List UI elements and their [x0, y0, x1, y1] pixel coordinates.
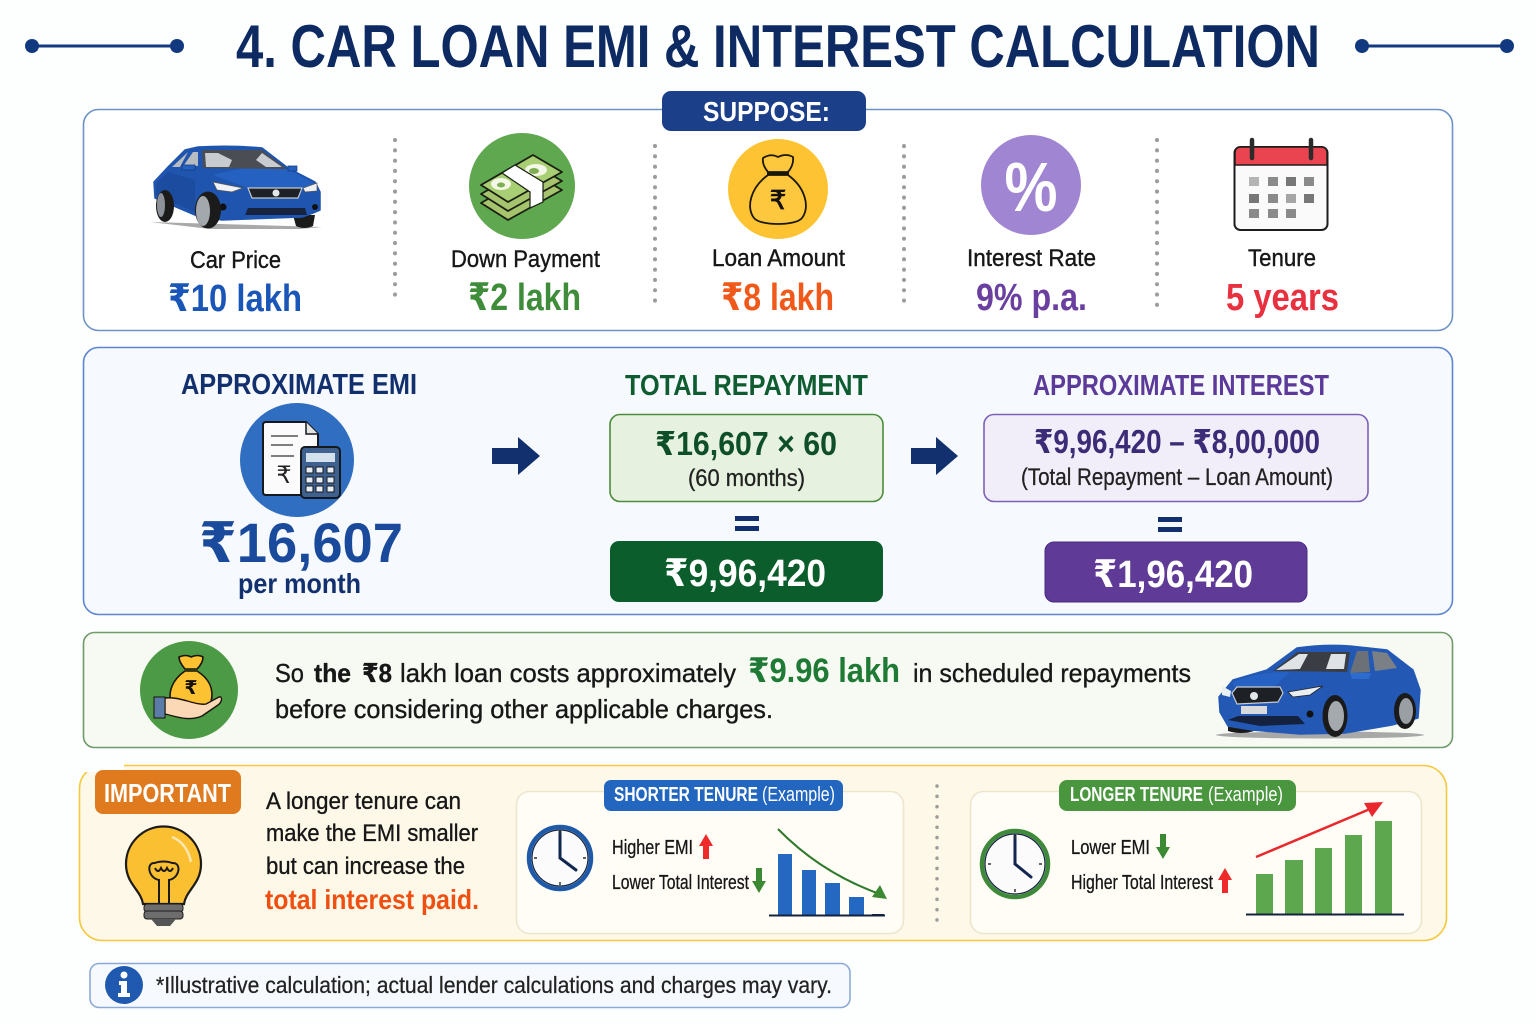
label: down payment: ₹2 lakh [468, 277, 581, 319]
text: summary statement: in scheduled repayments [913, 658, 1191, 688]
heading: suppose [662, 91, 866, 131]
result: total repayment [610, 541, 883, 602]
footnote [90, 964, 850, 1008]
formula: total repayment: (60 months) [688, 465, 805, 492]
formula: interest [984, 414, 1368, 502]
text: summary statement: ₹9.96 lakh [748, 652, 900, 690]
badge: important: IMPORTANT [104, 778, 231, 808]
icon: blue car [150, 146, 322, 229]
formula: interest: ₹9,96,420 – ₹8,00,000 [1034, 423, 1320, 460]
label: down payment: Down Payment [451, 246, 600, 273]
label: loan amount: ₹8 lakh [721, 277, 834, 319]
heading: suppose: SUPPOSE: [703, 96, 830, 127]
label: tenure [1226, 245, 1339, 319]
icon: light bulb [126, 827, 201, 926]
text: important explanation: total interest paid. [265, 884, 479, 915]
icon: info [105, 966, 143, 1004]
text: summary statement: So [275, 658, 304, 688]
icon: calendar [1234, 140, 1328, 230]
text: summary statement [275, 652, 1191, 724]
badge: longer tenure [1059, 780, 1296, 811]
icon: money bag [728, 139, 828, 239]
label: interest rate: Interest Rate [967, 245, 1096, 272]
icon: percent [981, 135, 1081, 235]
heading: total repayment: TOTAL REPAYMENT [625, 370, 868, 402]
icon: document and calculator [240, 403, 354, 517]
icon: hand holding money bag: ₹ [184, 678, 198, 699]
panel: summary [84, 632, 1452, 748]
result: interest [1045, 542, 1307, 602]
badge: shorter tenure: SHORTER TENURE [614, 784, 758, 806]
icon: blue car side view [1216, 645, 1424, 738]
formula: interest: (Total Repayment – Loan Amount) [1021, 464, 1333, 491]
text: lower emi: Lower EMI [1071, 837, 1150, 859]
title: 4. CAR LOAN EMI & INTEREST CALCULATION [236, 13, 1320, 80]
label: car price: ₹10 lakh [168, 278, 302, 320]
panel: important note [80, 764, 1446, 940]
label: tenure: Tenure [1248, 245, 1316, 272]
label: loan amount: Loan Amount [712, 245, 845, 272]
arrow: emi to repayment [492, 437, 540, 475]
arrow: down green [752, 868, 766, 893]
arrow: up red [699, 834, 713, 859]
text: important explanation: but can increase the [266, 853, 465, 880]
text: higher emi: Higher EMI [612, 837, 693, 859]
label: down payment [451, 246, 600, 319]
badge: shorter tenure [604, 780, 843, 811]
icon: percent: % [1004, 148, 1058, 226]
result: total repayment: ₹9,96,420 [664, 553, 826, 595]
heading: approximate interest: APPROXIMATE INTEREST [1033, 370, 1329, 402]
text: disclaimer: *Illustrative calculation; actual lender calculations and charges may vary. [156, 972, 832, 998]
badge: longer tenure: LONGER TENURE [1070, 784, 1203, 806]
icon: cash stack [469, 133, 575, 239]
text: important explanation: A longer tenure can [266, 788, 461, 815]
result: interest: ₹1,96,420 [1093, 554, 1253, 596]
heading: approximate emi: APPROXIMATE EMI [181, 369, 417, 401]
panel: calculation [84, 348, 1452, 614]
text: summary statement: ₹8 [362, 658, 392, 688]
icon: hand holding money bag [140, 641, 238, 739]
icon: document and calculator: ₹ [276, 462, 292, 489]
card: shorter tenure [516, 780, 904, 934]
label: loan amount [712, 245, 845, 319]
icon: blue clock [529, 827, 591, 889]
formula: total repayment [610, 414, 883, 502]
label: interest rate [967, 245, 1096, 319]
formula: total repayment: ₹16,607 × 60 [655, 425, 837, 462]
label: tenure: 5 years [1226, 277, 1339, 319]
badge: longer tenure: (Example) [1208, 784, 1283, 806]
label: car price: Car Price [190, 247, 281, 274]
label: interest rate: 9% p.a. [976, 277, 1087, 319]
text: summary statement: lakh loan costs approximately [400, 658, 736, 688]
value: emi amount: ₹16,607 [199, 511, 403, 574]
arrow: up red [1218, 868, 1232, 893]
text: summary statement: the [314, 658, 351, 688]
chart: falling bars [769, 829, 887, 916]
card: longer tenure [970, 780, 1422, 934]
badge: shorter tenure: (Example) [762, 784, 835, 806]
panel: suppose inputs [84, 91, 1452, 330]
chart: rising bars [1246, 802, 1404, 914]
icon: money bag: ₹ [770, 185, 786, 215]
value: emi amount: per month [238, 568, 361, 599]
text: summary statement: before considering other applicable charges. [275, 694, 773, 724]
arrow: down green [1156, 834, 1170, 859]
text: important explanation: make the EMI smaller [266, 820, 478, 847]
text: lower total interest: Lower Total Interest [612, 872, 749, 894]
icon: green clock [982, 831, 1048, 897]
arrow: repayment to interest [911, 437, 958, 475]
text: higher total interest: Higher Total Interest [1071, 872, 1213, 894]
label: car price [168, 247, 302, 320]
badge: important [95, 770, 241, 814]
text: important explanation [265, 788, 479, 915]
